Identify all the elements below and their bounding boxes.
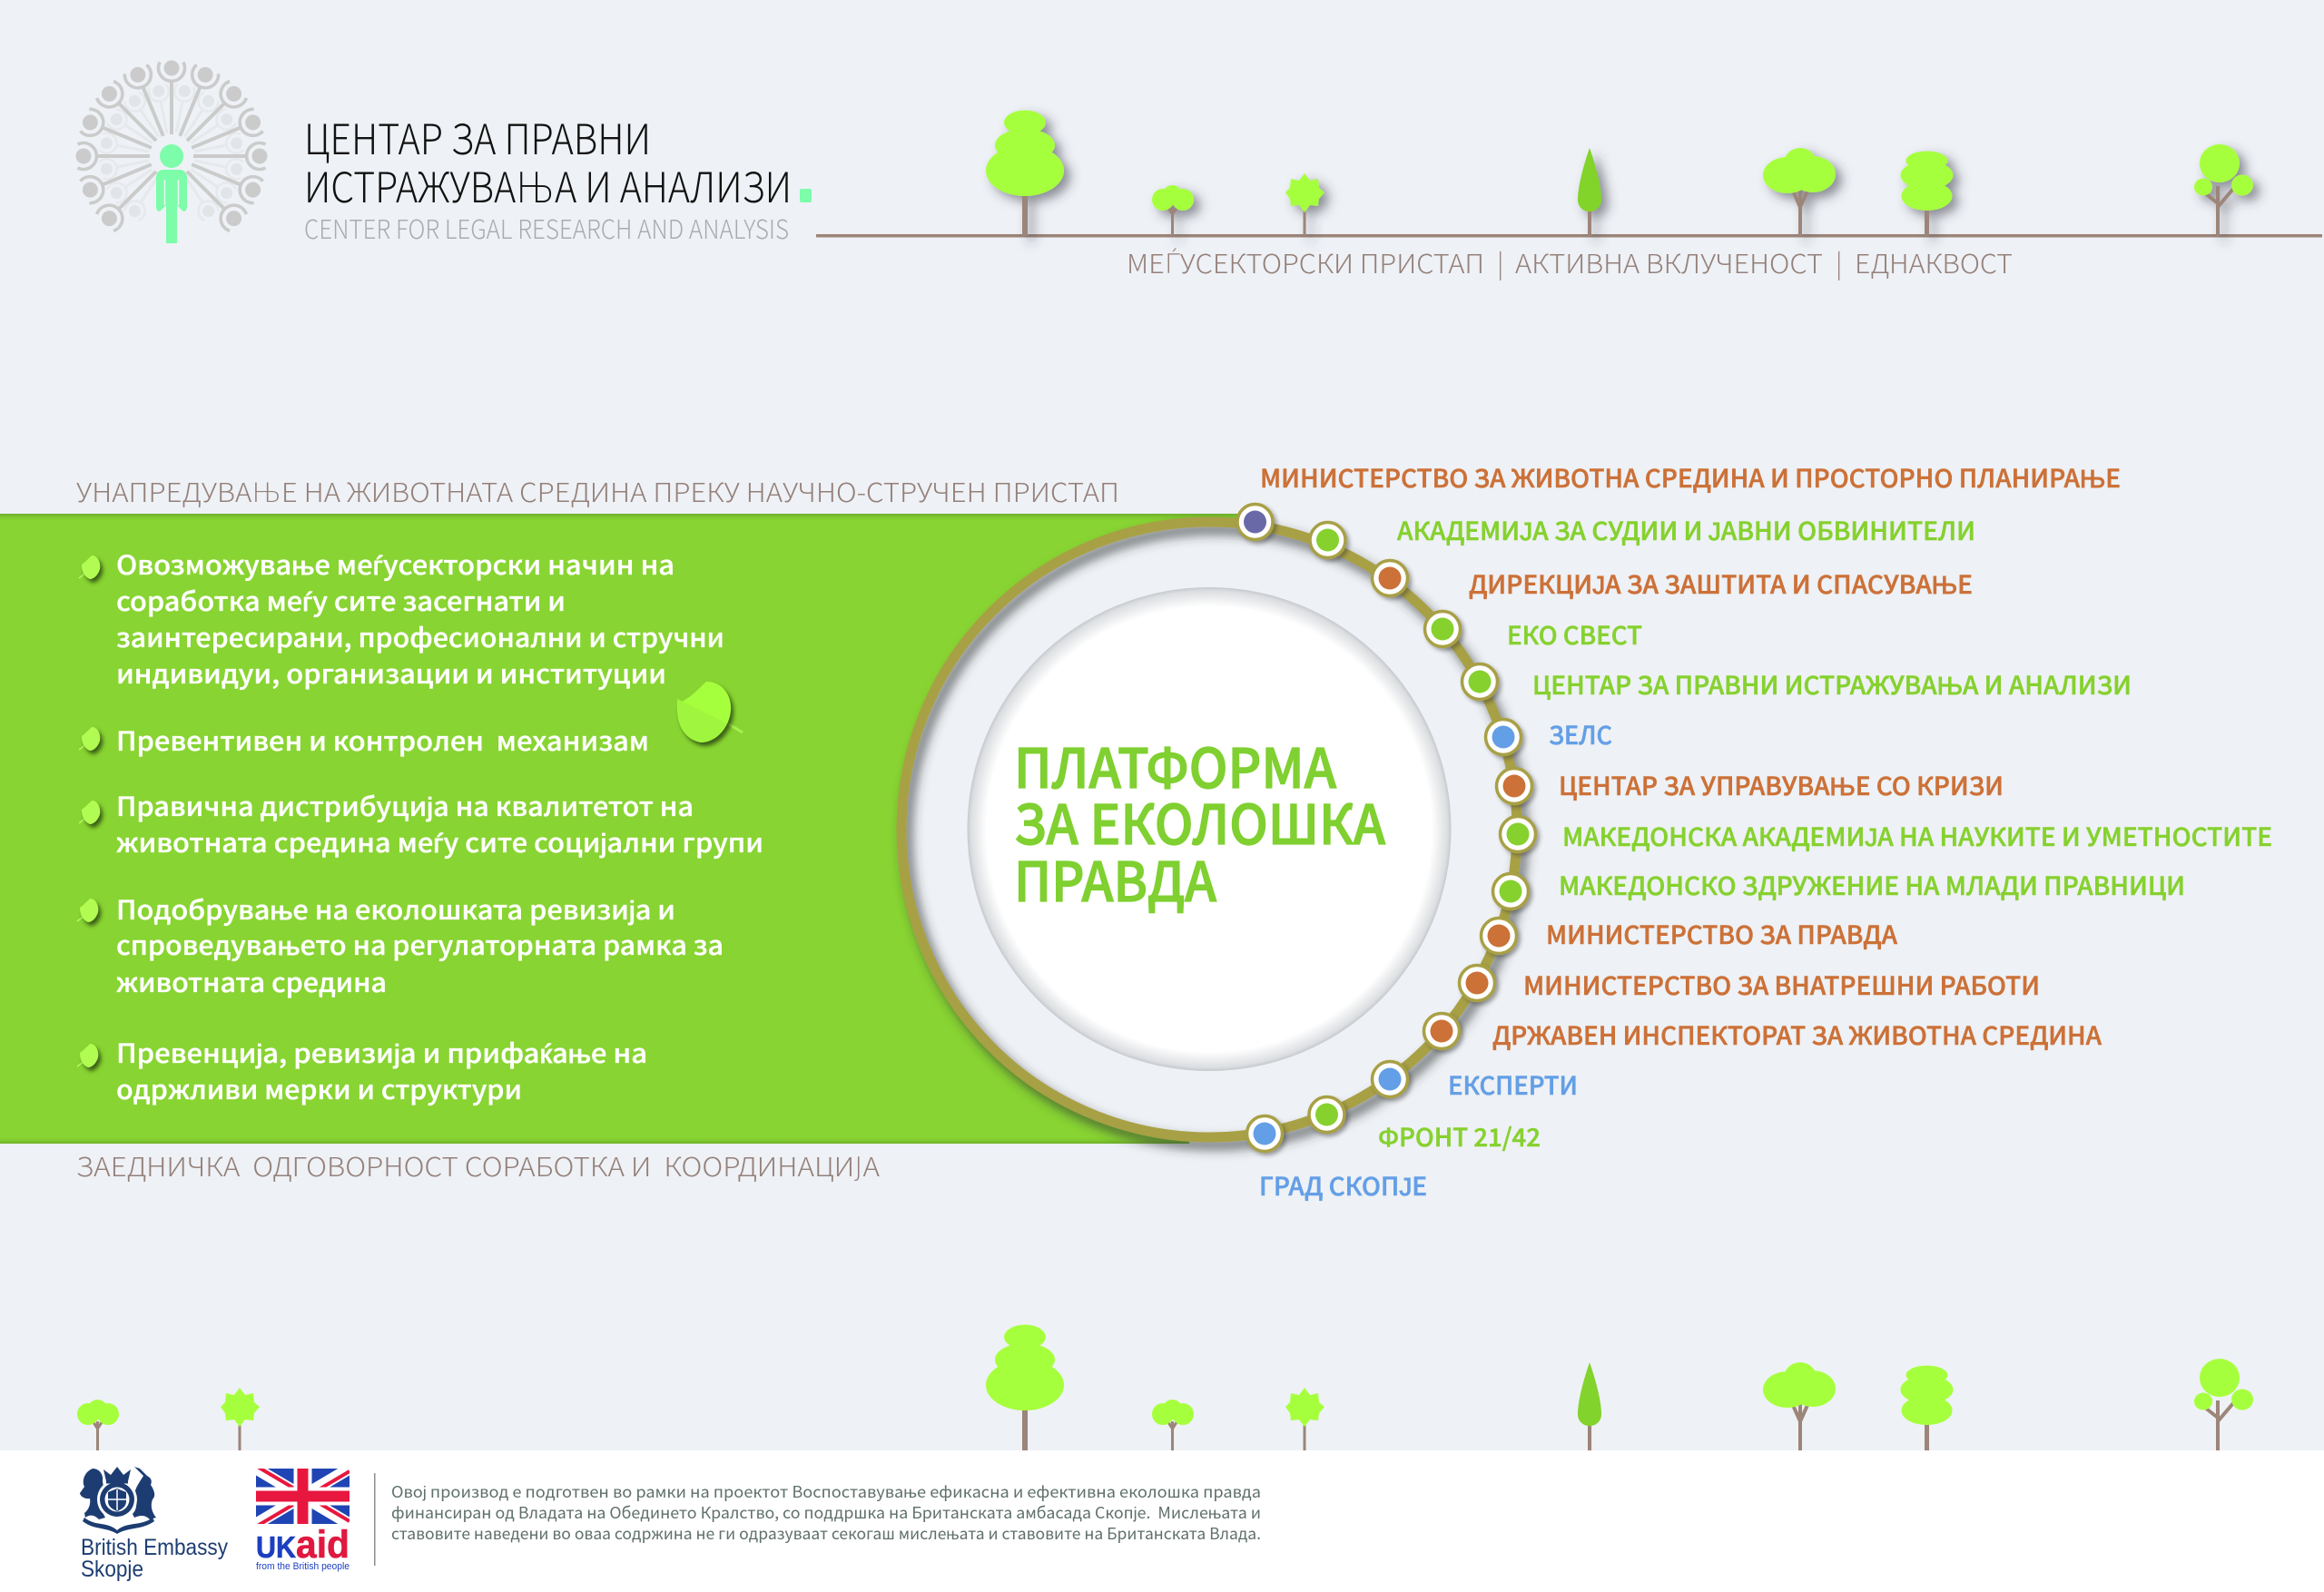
label 7: ЦЕНТАР ЗА УПРАВУВАЊЕ СО КРИЗИ	[1559, 766, 2004, 802]
timeline nodes	[1237, 505, 1536, 1151]
node 5	[1462, 664, 1498, 699]
node 1	[1237, 505, 1273, 539]
bullet 1: соработка ме ѓу сите засегнати и	[116, 581, 566, 619]
bullet 4: спроведува њето на регулаторната рамка за	[116, 925, 724, 963]
label 5: ЦЕНТАР ЗА ПРАВНИ ИСТРАЖУВА ЊА И АНАЛИЗИ	[1532, 665, 2132, 702]
label 10: МИНИСТЕРСТВО ЗА ПРАВДА	[1546, 915, 1898, 951]
divider and disclaimer: ставовите наведени во оваа содржина не ги одразуваат секогаш мислењата и ставовите на Британската Влада.	[391, 1522, 1261, 1545]
icon: royal coat of arms	[80, 1467, 156, 1534]
UKaid logo: aid	[296, 1523, 350, 1567]
node 3	[1373, 561, 1407, 595]
node 12	[1423, 1013, 1460, 1049]
label 11: МИНИСТЕРСТВО ЗА ВНАТРЕШНИ РАБОТИ	[1523, 966, 2040, 1002]
bottom tree row	[77, 1325, 2253, 1450]
label 14: ФРОНТ 21/42	[1378, 1117, 1541, 1154]
top tree row with ground line	[816, 111, 2322, 238]
node 13	[1373, 1062, 1407, 1096]
node 14	[1309, 1096, 1344, 1133]
tagline: |	[1497, 243, 1503, 281]
lower section heading: ЗАЕДНИЧКА ОДГОВОРНОСТ СОРАБОТКА И КООРДИНАЦИ ЈА	[76, 1146, 880, 1184]
label 3: ДИРЕКЦИЈА ЗА ЗАШТИТА И СПАСУВА ЊЕ	[1469, 565, 1973, 601]
icon: UK flag	[256, 1466, 350, 1527]
bullet 3: Правична дистрибуци ја на квалитетот на	[116, 786, 694, 824]
label 13: ЕКСПЕРТИ	[1448, 1066, 1578, 1102]
organisation name: ИСТРАЖУВАЊА И АНАЛИЗИ	[304, 155, 792, 215]
platform circle: ring, interior and white disc	[901, 522, 1517, 1137]
bullet list	[77, 545, 763, 1107]
UKaid logo	[256, 1523, 350, 1572]
panel: footer	[0, 1450, 2324, 1592]
bullet 2: Превентивен и контролен механизам	[116, 721, 649, 759]
bullet 1	[79, 545, 724, 692]
icon: large leaf	[677, 682, 743, 742]
label 6: ЗЕЛС	[1549, 715, 1612, 752]
title	[1014, 725, 1386, 918]
label 4: ЕКО СВЕСТ	[1507, 615, 1642, 652]
tagline: ЕДНАКВОСТ	[1855, 243, 2013, 281]
node 2	[1310, 523, 1345, 557]
label 12: ДРЖАВЕН ИНСПЕКТОРАТ ЗА ЖИВОТНА СРЕДИНА	[1492, 1016, 2102, 1052]
label 9: МАКЕДОНСКО ЗДРУЖЕНИЕ НА МЛАДИ ПРАВНИЦИ	[1559, 866, 2185, 902]
panel: green band	[0, 514, 1239, 1144]
label 15: ГРАД СКОПЈЕ	[1259, 1166, 1427, 1203]
bullet 3: животната средина ме ѓу сите соци јални групи	[116, 822, 763, 860]
bullet 4: Подобрува ње на еколошката ревизи ја и	[116, 889, 675, 928]
bullet 1: заинтересирани, професионални и стручни	[116, 617, 724, 655]
tagline: |	[1836, 243, 1842, 281]
bullet 1: Овозможува ње меѓусекторски начин на	[116, 545, 675, 583]
bullet 3	[79, 786, 763, 860]
node 9	[1492, 873, 1529, 909]
tagline	[1127, 243, 2013, 281]
node 8	[1500, 817, 1536, 851]
node 4	[1425, 612, 1460, 646]
node 10	[1482, 919, 1516, 953]
organisation name: CENTER FOR LEGAL RESEARCH AND ANALYSIS	[304, 209, 789, 247]
British Embassy Skopje: Skopje	[81, 1557, 143, 1582]
tagline: МЕЃУСЕКТОРСКИ ПРИСТАП	[1127, 243, 1484, 281]
UKaid logo: from the British people	[256, 1561, 350, 1572]
bullet 5: одржливи мерки и структури	[116, 1069, 522, 1107]
divider and disclaimer	[374, 1473, 1261, 1566]
bullet 5: Превенци ја, ревизи ја и прифа ќање на	[116, 1033, 647, 1071]
label 1: МИНИСТЕРСТВО ЗА ЖИВОТНА СРЕДИНА И ПРОСТОРНО ПЛАНИРА ЊЕ	[1260, 458, 2121, 495]
organisation name: ЦЕНТАР ЗА ПРАВНИ	[304, 107, 651, 167]
British Embassy Skopje: British Embassy	[81, 1535, 228, 1560]
title: ПРАВДА	[1014, 839, 1217, 918]
divider and disclaimer: Овој производ е подготвен во рамки на проектот Воспоставува ње ефикасна и ефективна еколошка правда	[391, 1480, 1261, 1503]
stakeholder labels	[1259, 458, 2272, 1203]
title: ЗА ЕКОЛОШКА	[1014, 781, 1386, 860]
label 8: МАКЕДОНСКА АКАДЕМИЈА НА НАУКИТЕ И УМЕТНОСТИТЕ	[1562, 817, 2272, 853]
label 2: АКАДЕМИЈА ЗА СУДИИ И ЈАВНИ ОБВИНИТЕЛИ	[1397, 511, 1975, 547]
title: ПЛАТФОРМА	[1014, 725, 1337, 804]
bullet 4	[77, 889, 724, 1000]
node 7	[1496, 768, 1532, 804]
node 11	[1460, 966, 1494, 1000]
bullet 1: индивидуи, организации и институции	[116, 654, 666, 692]
node 6	[1485, 719, 1521, 755]
bullet 4: животната средина	[116, 962, 387, 1000]
upper section heading: УНАПРЕДУВА ЊЕ НА ЖИВОТНАТА СРЕДИНА ПРЕКУ НАУЧНО-СТРУЧЕН ПРИСТАП	[76, 472, 1119, 510]
UKaid logo: UK	[256, 1530, 296, 1564]
organisation name	[304, 107, 812, 247]
British Embassy Skopje	[81, 1535, 228, 1582]
tagline: АКТИВНА ВКЛУЧЕНОСТ	[1515, 243, 1823, 281]
logo: dandelion person	[76, 60, 267, 243]
divider and disclaimer: финансиран од Владата на Обединето Кралство, со поддршка на Британската амбасада Скоп је. Мислењата и	[391, 1501, 1261, 1524]
bullet 5	[77, 1033, 647, 1107]
node 15	[1247, 1116, 1282, 1151]
